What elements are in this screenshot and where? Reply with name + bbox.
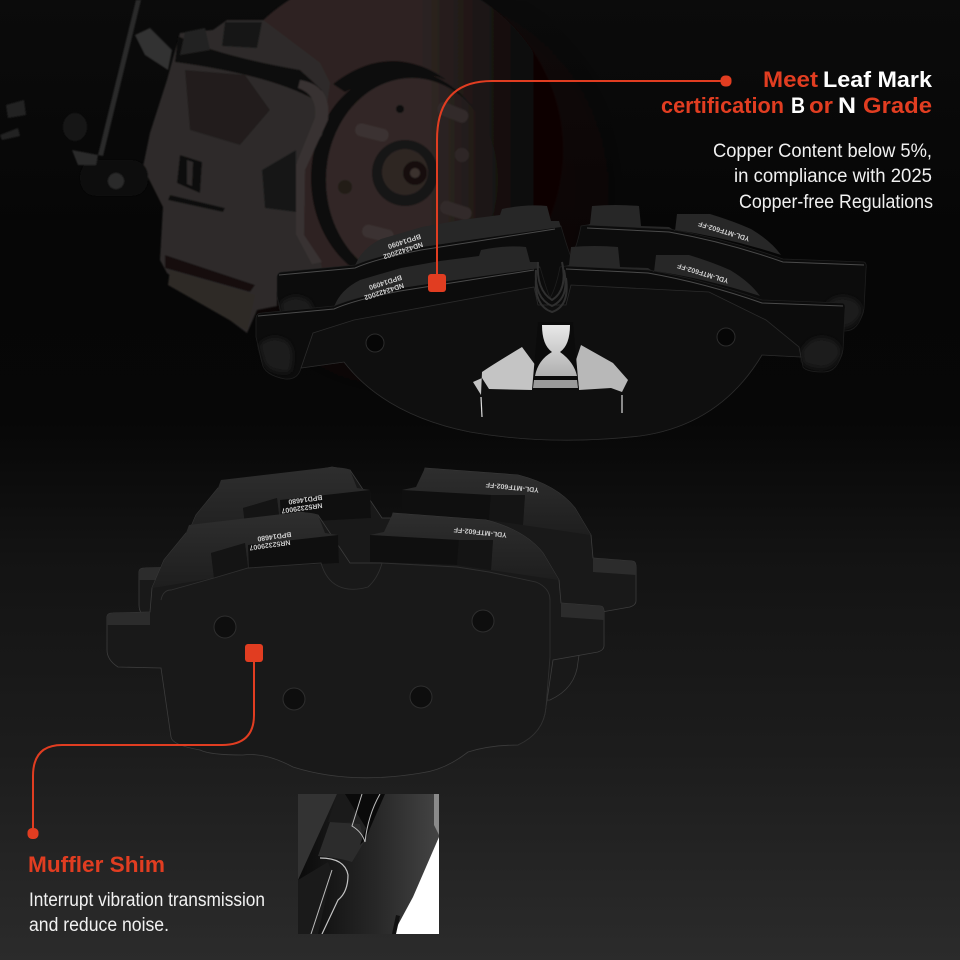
heading: certification: Grade (863, 93, 932, 118)
back top brake pad (277, 205, 866, 399)
front top brake pad (256, 246, 845, 440)
metal retaining clip (473, 322, 628, 417)
wear spring (536, 262, 567, 312)
text: muffler shim description: and reduce noise. (29, 915, 169, 936)
text: copper content: in compliance with 2025 (734, 166, 932, 187)
suspension strut and ball joint (0, 0, 210, 196)
heading: certification: Leaf Mark (823, 67, 933, 92)
front top pad markings: BPD14090 (368, 273, 403, 290)
back top pad markings: ND42422002 (382, 240, 424, 260)
back bottom brake pad (139, 467, 636, 733)
front top pad markings (363, 261, 730, 301)
front bottom pad markings: BPD14680 (257, 530, 292, 542)
caliper (143, 20, 330, 333)
callout line: certification (428, 76, 732, 292)
front bottom pad markings: NR52329007 (249, 538, 291, 551)
callout line: muffler shim (28, 644, 263, 839)
heading: certification (661, 67, 933, 118)
text: muffler shim description: Interrupt vibration transmission (29, 890, 265, 911)
back bottom pad markings (281, 480, 539, 514)
back bottom pad markings: YDL-MTF602-FF (485, 480, 539, 493)
front bottom pad markings: YDL-MTF602-FF (453, 525, 507, 538)
front top pad markings: YDL-MTF602-FF (676, 261, 730, 284)
heading: certification: B (791, 93, 805, 118)
back top pad markings: YDL-MTF602-FF (697, 219, 751, 242)
front bottom brake pad (107, 512, 604, 778)
text: copper content: Copper-free Regulations (739, 192, 933, 213)
heading: certification: or (809, 93, 833, 118)
rivets (366, 334, 384, 352)
back top pad markings (382, 219, 751, 260)
front top pad markings: ND42422002 (363, 281, 405, 301)
text: copper content: Copper Content below 5%, (713, 141, 932, 162)
back top pad markings: BPD14090 (387, 232, 422, 249)
rivets (214, 610, 494, 710)
heading: certification: certification (661, 93, 784, 118)
text: muffler shim description (29, 890, 265, 936)
photo: caliper and brake disc (0, 0, 680, 440)
heading: certification: Meet (763, 67, 819, 92)
text: copper content (713, 141, 933, 213)
back bottom pad markings: NR52329007 (281, 501, 323, 514)
heading: certification: N (838, 93, 856, 118)
inset photo: shim detail (298, 794, 439, 934)
back bottom pad markings: BPD14680 (288, 493, 323, 505)
disc rotor (207, 0, 563, 328)
front bottom pad markings (249, 525, 507, 551)
heading: muffler shim: Muffler Shim (28, 852, 165, 877)
